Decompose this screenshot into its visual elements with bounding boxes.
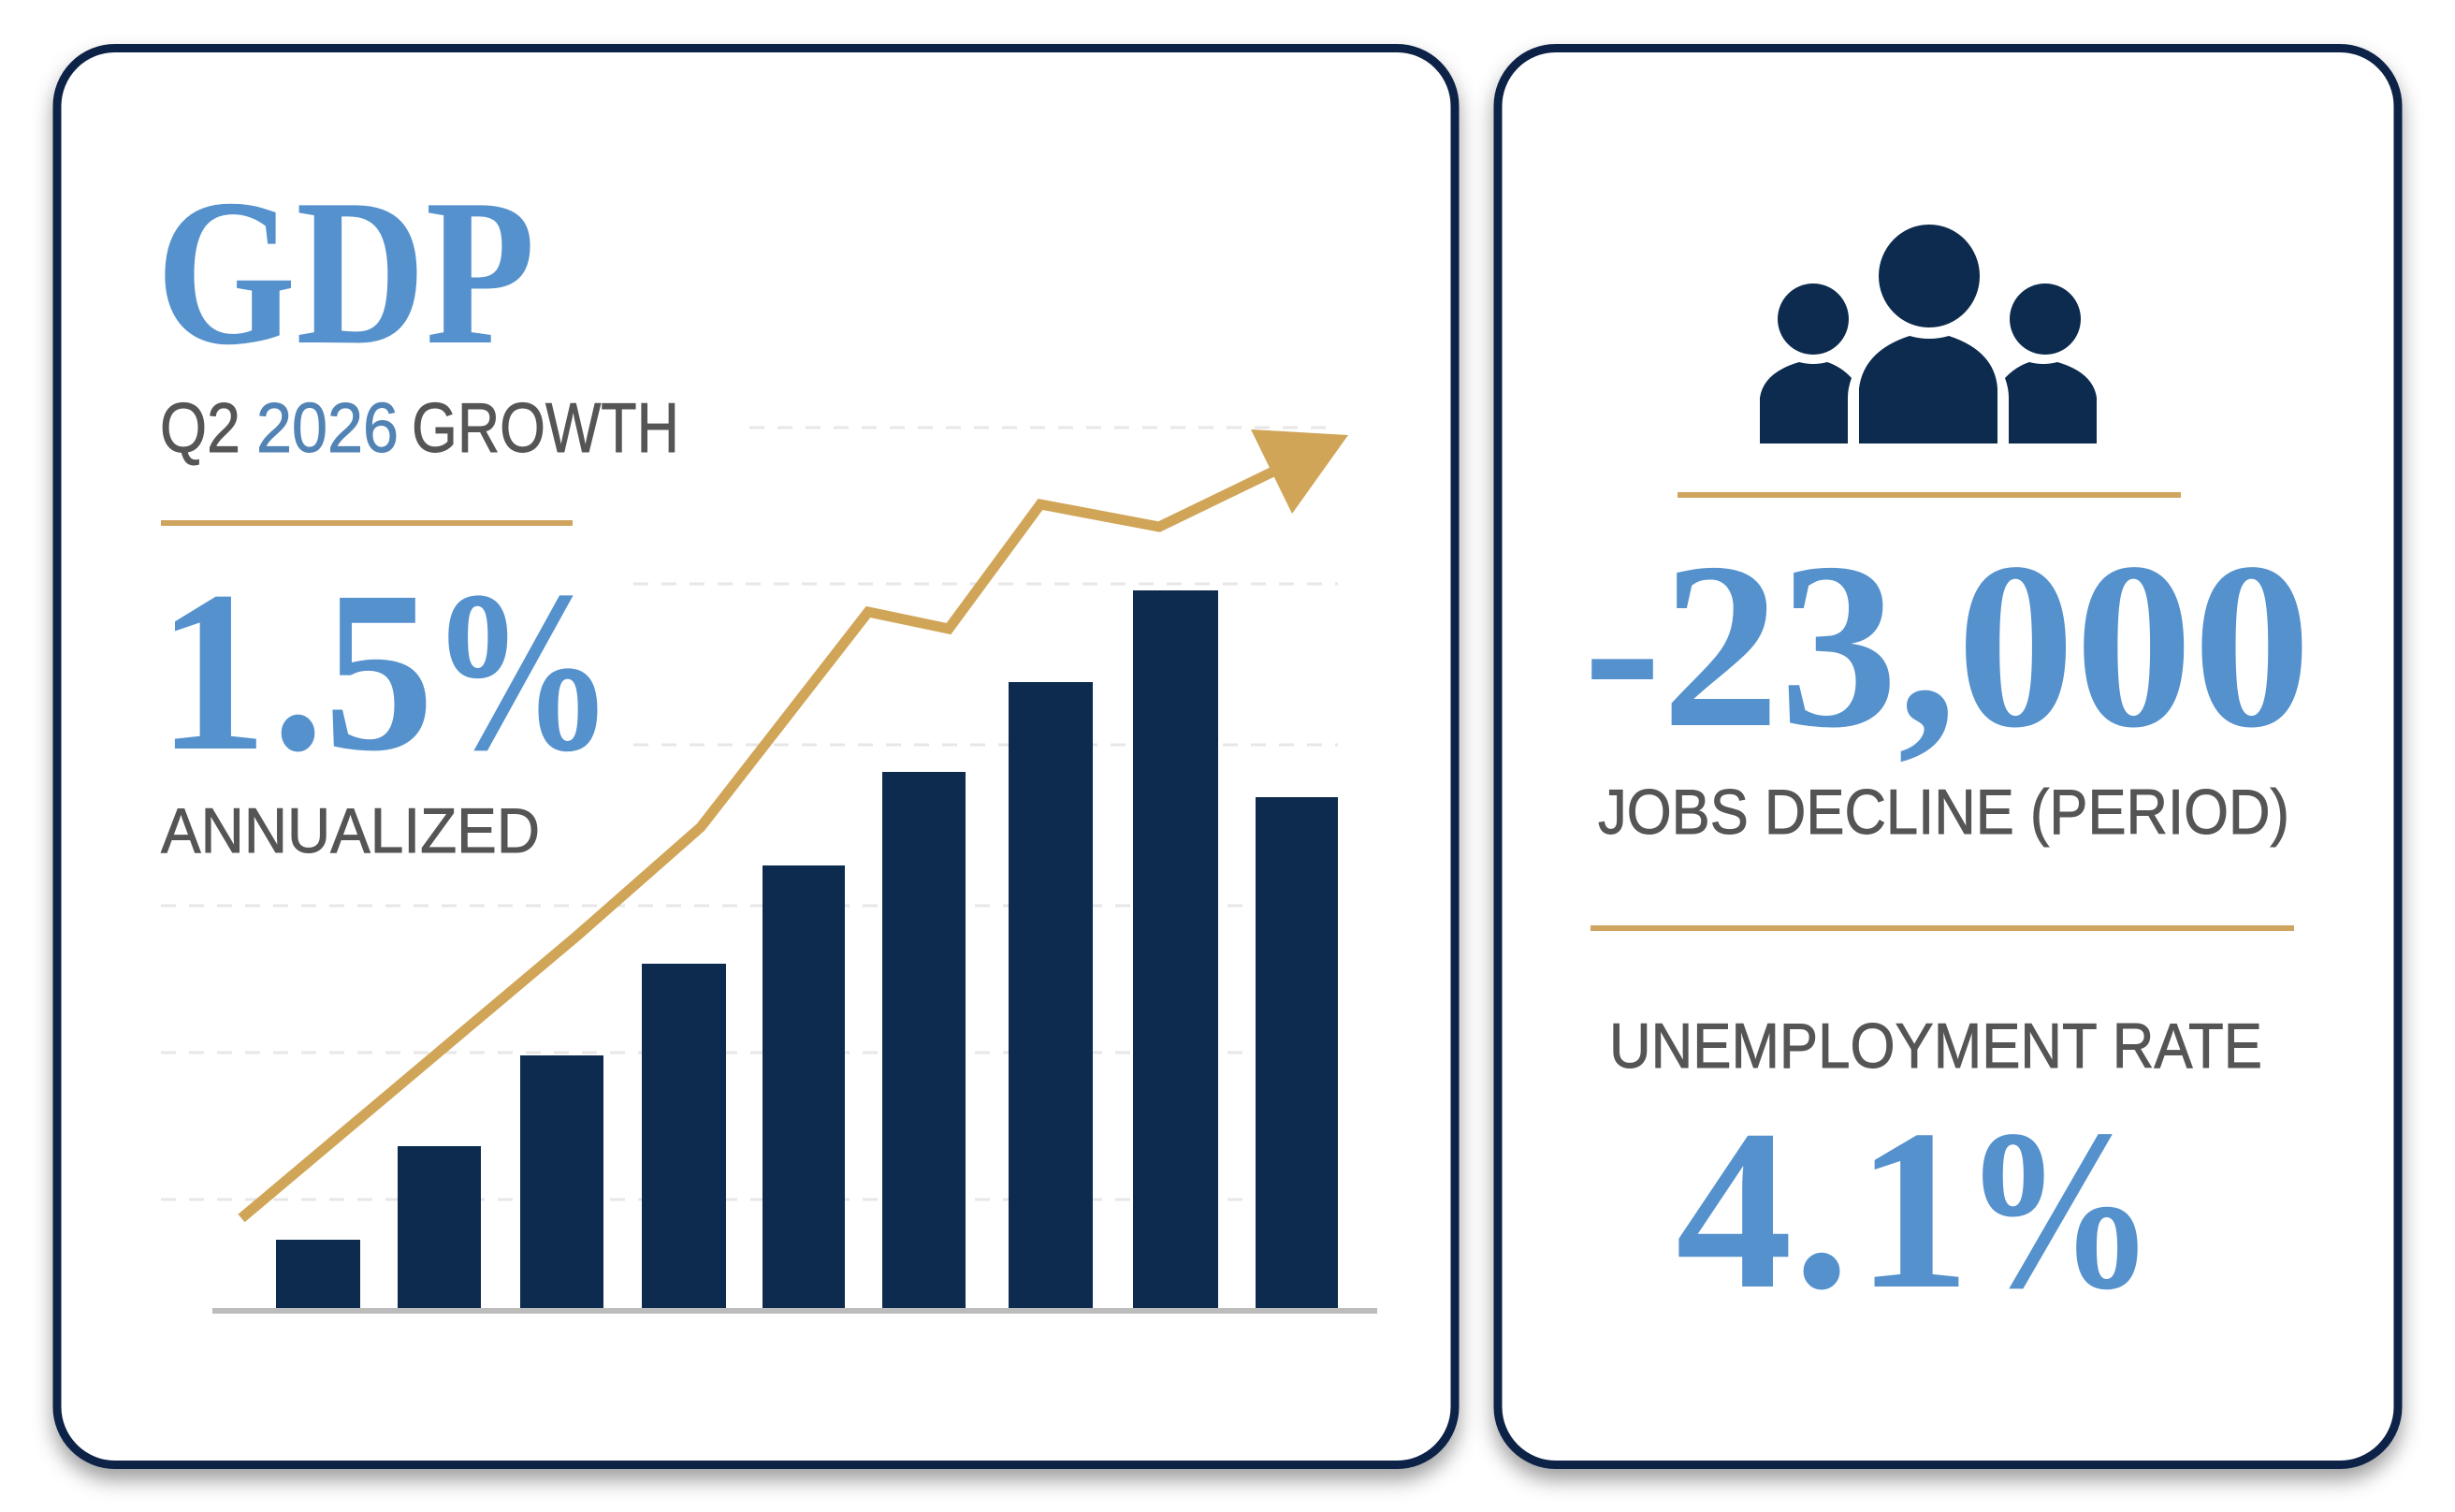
- metric: 4.1%: 1: [1856, 1083, 1970, 1336]
- label: annualized: ANNUALIZED: [161, 795, 540, 866]
- gold divider bottom: [1591, 925, 2294, 931]
- metric: 1.5%: %: [429, 545, 615, 799]
- metric: 4.1%: .: [1794, 1083, 1850, 1336]
- bars: [276, 590, 1338, 1308]
- heading: GDP: GDP: [156, 156, 535, 388]
- chart: bars and trend line: [161, 428, 1377, 1314]
- metric: 4.1%: [1676, 1083, 2156, 1336]
- panel: jobs: [1498, 49, 2398, 1465]
- metric: 1.5%: 1: [157, 545, 268, 799]
- subheading: Q2 2026 growth: 2026: [256, 388, 399, 467]
- gold divider top: [1678, 492, 2181, 498]
- trend line with arrow: [241, 429, 1348, 1218]
- label: unemployment rate: UNEMPLOYMENT RATE: [1609, 1010, 2262, 1082]
- label: jobs decline: JOBS DECLINE (PERIOD): [1598, 777, 2289, 848]
- metric: 4.1%: 4: [1676, 1083, 1793, 1336]
- subheading: Q2 2026 growth: GROWTH: [412, 388, 679, 467]
- metric: 1.5%: 5: [324, 545, 434, 799]
- panel: GDP: [57, 49, 1455, 1465]
- gold divider: [161, 520, 573, 526]
- metric: 1.5%: .: [272, 545, 324, 799]
- subheading: Q2 2026 growth: [160, 388, 679, 467]
- chart axis: [212, 1308, 1377, 1314]
- metric: -23,000: -23,000: [1583, 514, 2311, 777]
- subheading: Q2 2026 growth: Q2: [160, 388, 240, 467]
- icon: three people: [1760, 225, 2097, 443]
- metric: 1.5%: [157, 545, 615, 799]
- metric: 4.1%: %: [1963, 1083, 2156, 1336]
